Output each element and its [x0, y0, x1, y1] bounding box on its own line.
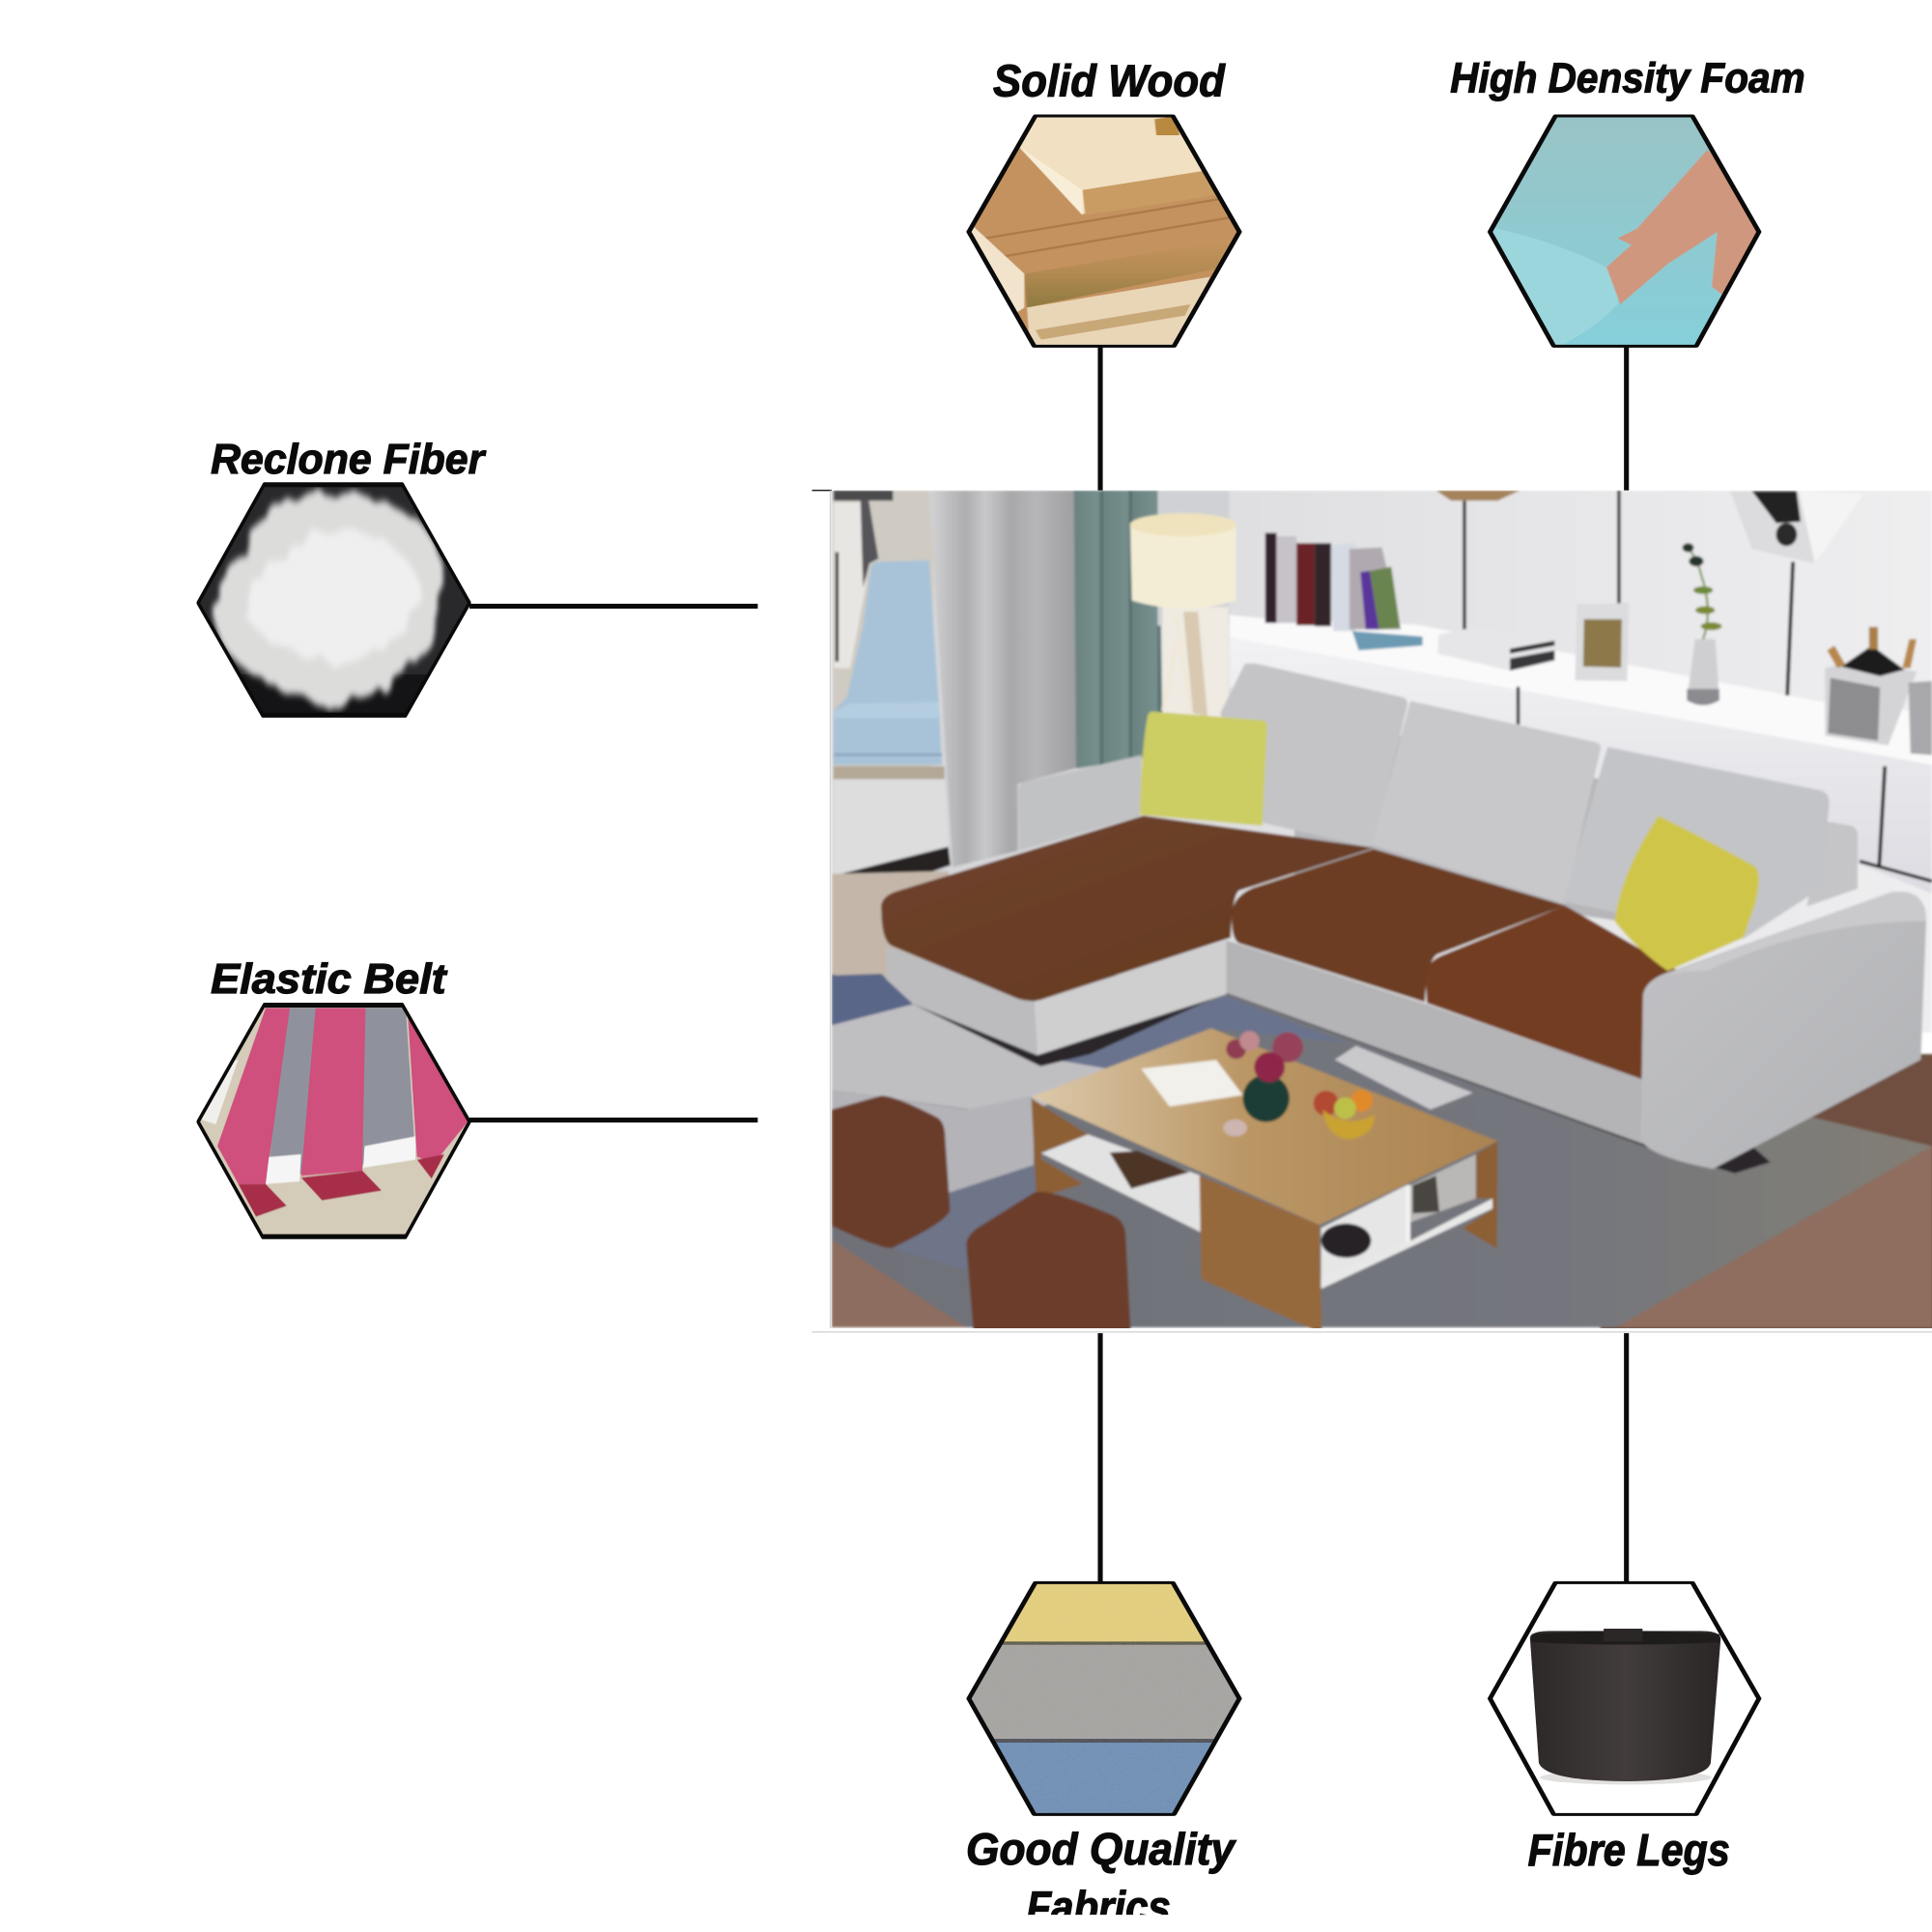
hexagon: high density foam: [1485, 113, 1767, 351]
white wall shelf: [1230, 615, 1932, 765]
connector: reclone fiber to sofa: [469, 605, 757, 609]
material: fibre legs: [1490, 1582, 1759, 1875]
heading: good quality fabrics: Good Quality: [966, 1824, 1236, 1874]
ottoman right: [966, 1192, 1131, 1331]
hexagon: reclone fiber: [196, 479, 473, 721]
flowers in vase: [1223, 1031, 1303, 1136]
top shelf ornament: [1436, 491, 1520, 500]
stacked books on shelf: [1352, 627, 1554, 670]
yellow pillow right: [1614, 815, 1759, 971]
books: [1265, 533, 1401, 631]
open book: [1141, 1060, 1243, 1107]
heading: fibre legs: Fibre Legs: [1528, 1825, 1730, 1875]
back cushion 2: [1372, 701, 1601, 904]
right arm: [1641, 892, 1926, 1169]
left arm: [1018, 755, 1142, 851]
chaise base: [886, 941, 1227, 1055]
hexagon: fibre legs: [1490, 1582, 1759, 1814]
yellow pillow left: [1140, 712, 1267, 826]
window and balcony: [832, 491, 952, 875]
coffee table: [1032, 1029, 1497, 1333]
connector: elastic belt to sofa: [469, 1118, 757, 1122]
room wall: [832, 491, 1932, 1033]
material: good quality fabrics: [963, 1579, 1246, 1932]
desk baskets: [1825, 627, 1932, 755]
floor: [832, 871, 1932, 1331]
ottoman left: [832, 1095, 950, 1248]
photo: living room with L-shaped sofa: [832, 491, 1932, 1333]
right seat: [1426, 905, 1678, 1079]
wall ornament: [1731, 491, 1814, 562]
photo edge lines: [812, 491, 1932, 1332]
sofa shadow: [913, 960, 1771, 1174]
right arm back: [1806, 821, 1858, 906]
middle seat: [1232, 849, 1565, 1002]
heading: good quality fabrics: [966, 1824, 1236, 1932]
chaise seat: [881, 815, 1374, 1001]
heading: good quality fabrics: Fabrics: [1026, 1882, 1171, 1932]
heading: solid wood: Solid Wood: [993, 55, 1226, 105]
picture frame: [1575, 603, 1629, 681]
shelf front: [1230, 638, 1932, 894]
area rug: [832, 974, 1932, 1327]
wall behind lamp: [1157, 491, 1229, 720]
green curtain: [1074, 491, 1163, 769]
connector: fibre legs to sofa: [1625, 1333, 1629, 1583]
back cushion 1: [1220, 664, 1407, 848]
connector: high density foam to sofa: [1625, 344, 1629, 491]
floor lamp: [1130, 513, 1236, 717]
fibre leg cup: [1530, 1629, 1720, 1784]
connector: solid wood to sofa: [1098, 344, 1102, 491]
fruit bowl: [1314, 1090, 1375, 1140]
grey curtain: [929, 491, 1077, 867]
blue chair: [834, 560, 942, 765]
material: elastic belt: [196, 956, 473, 1244]
hexagon: fabrics: [963, 1579, 1246, 1818]
material: reclone fiber: [196, 437, 486, 721]
material: high density foam: [1450, 56, 1805, 351]
heading: high density foam: High Density Foam: [1450, 56, 1805, 102]
material: solid wood: [963, 55, 1246, 351]
main base: [1227, 941, 1643, 1144]
back fill behind cushions: [1293, 736, 1617, 922]
vase with plant: [1683, 543, 1721, 705]
heading: elastic belt: Elastic Belt: [211, 956, 447, 1003]
back cushion 3: [1563, 747, 1830, 939]
heading: reclone fiber: Reclone Fiber: [211, 437, 486, 483]
connector: fabrics to sofa: [1098, 1333, 1102, 1583]
wall panel seams: [1464, 491, 1932, 881]
hexagon: elastic belt: [196, 1000, 473, 1244]
hexagon: solid wood: [963, 113, 1246, 351]
right arm top: [1679, 893, 1926, 972]
